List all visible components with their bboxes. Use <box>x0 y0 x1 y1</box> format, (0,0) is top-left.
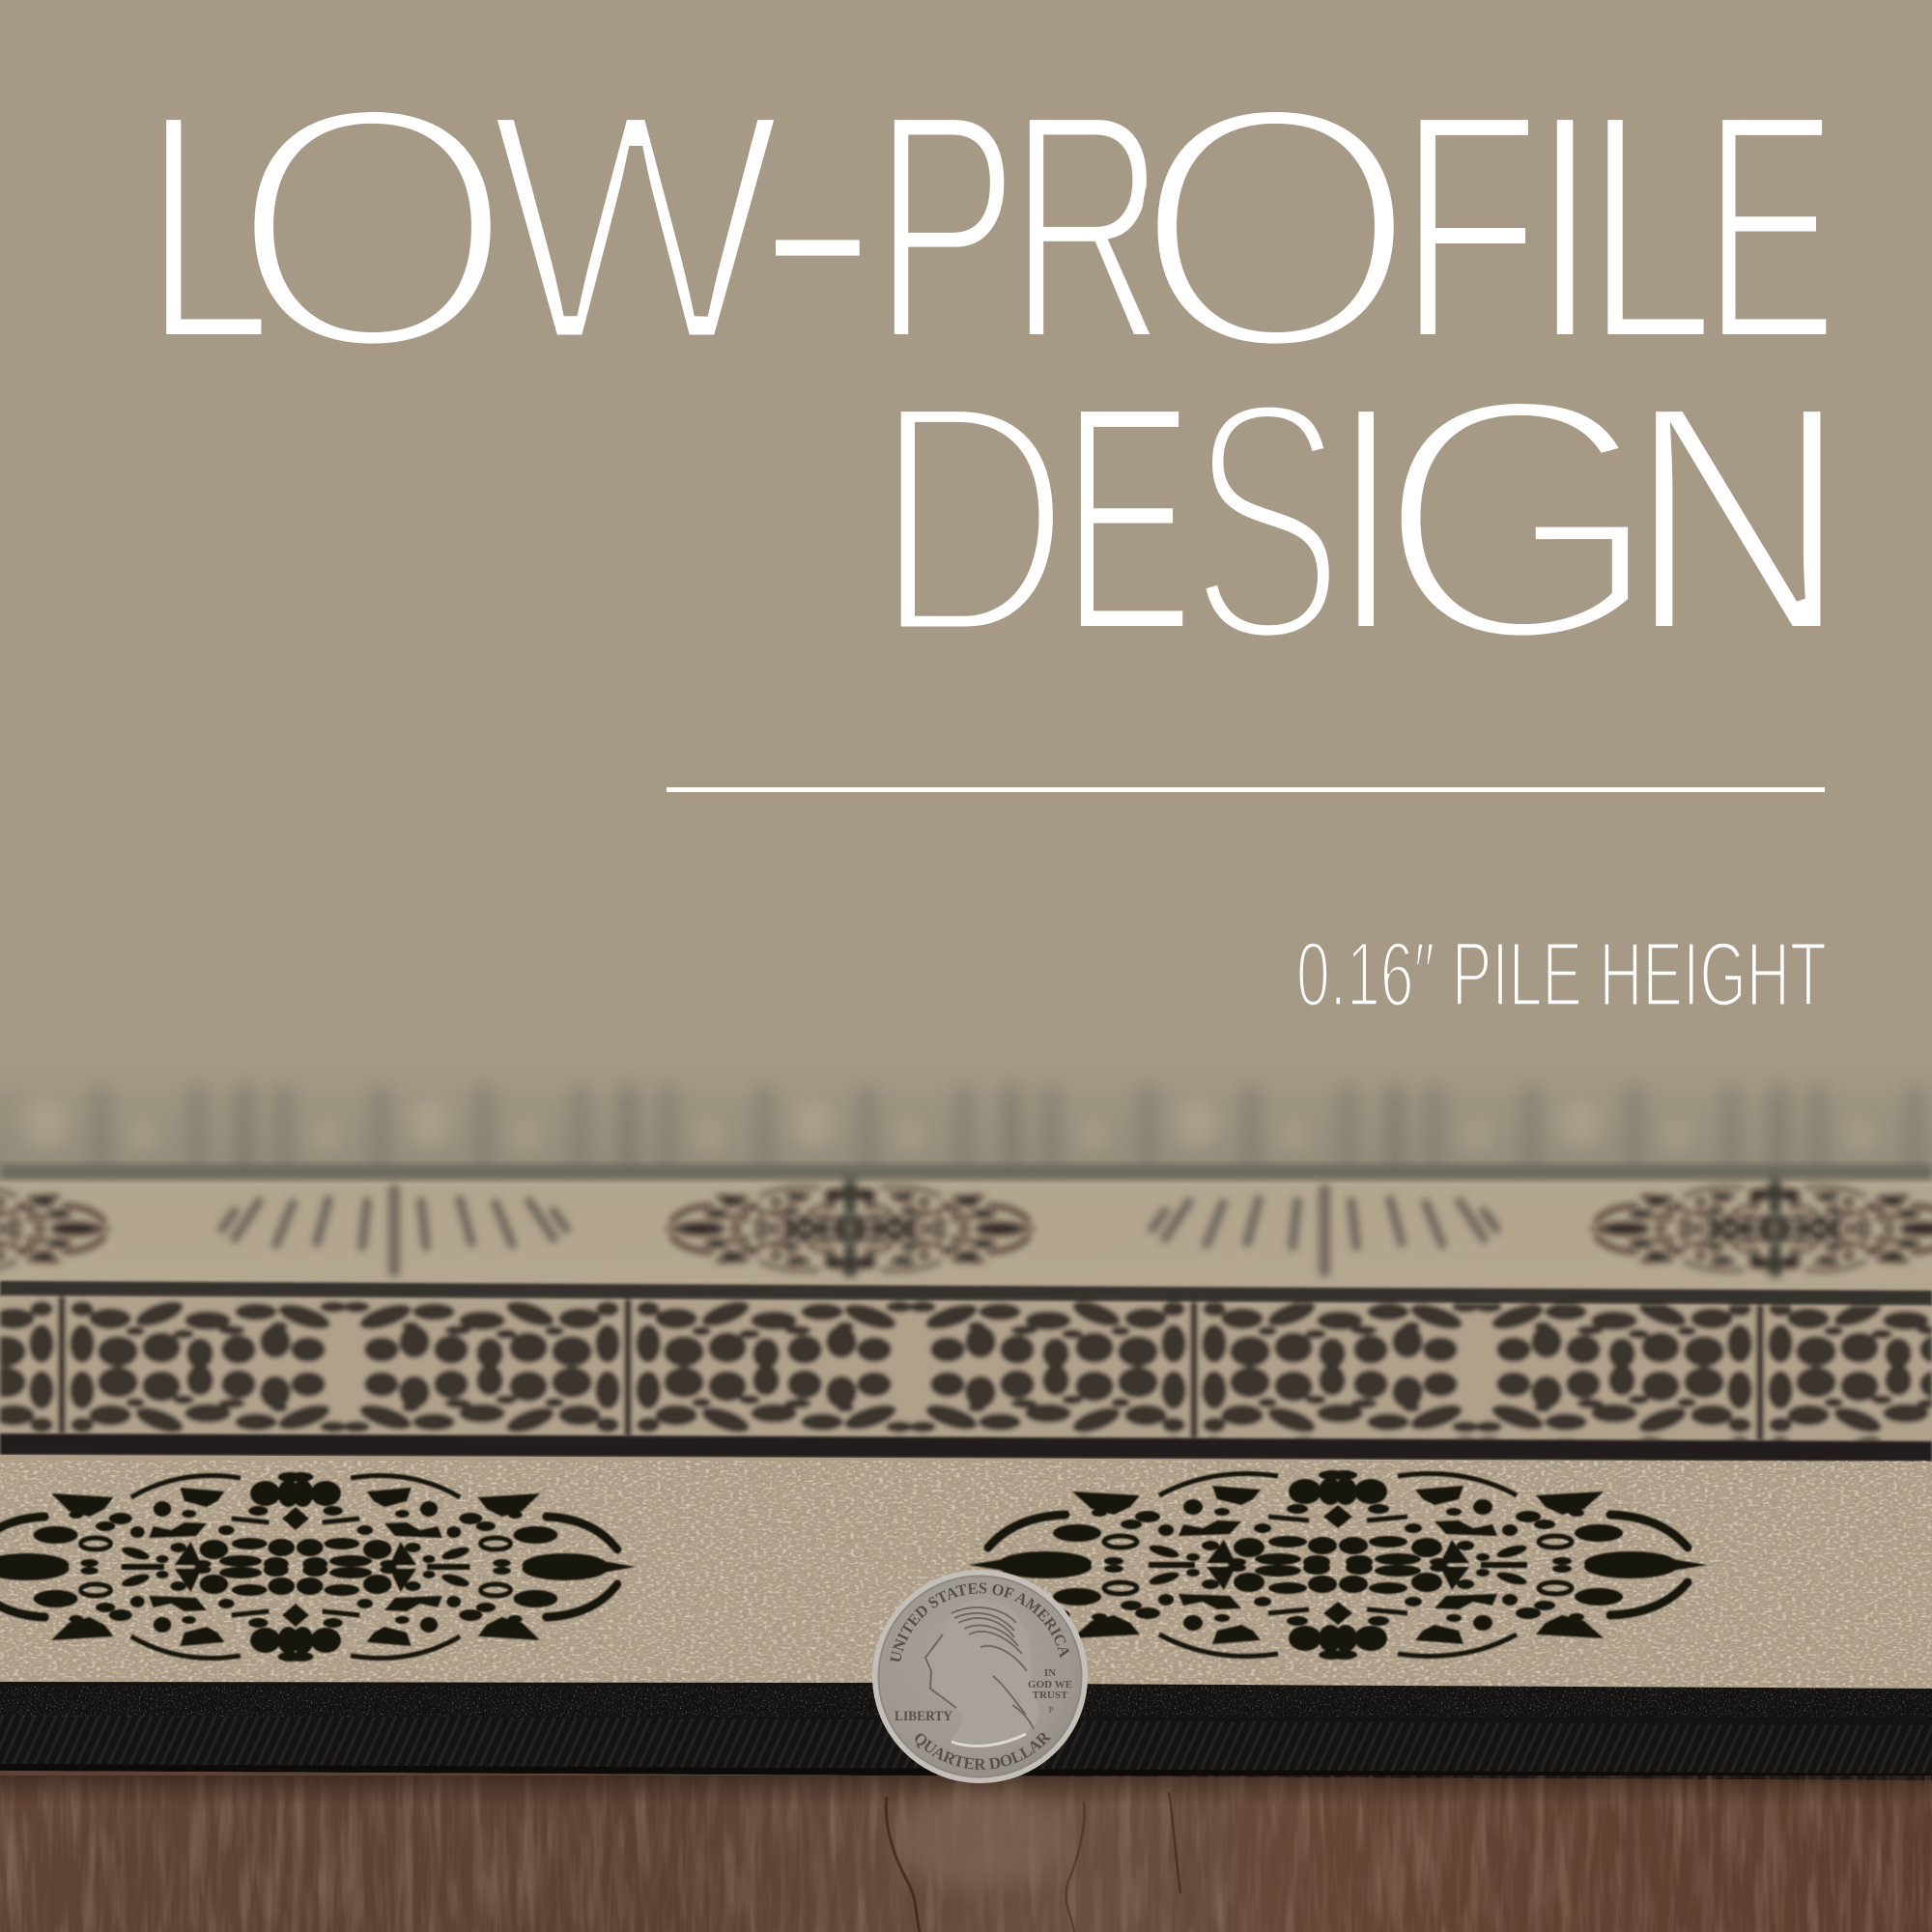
divider rule <box>667 787 1825 792</box>
rug band: woven field <box>0 1455 1932 1689</box>
medallion: left <box>0 1472 635 1662</box>
title: I <box>1530 45 1600 409</box>
title: D <box>872 332 1072 705</box>
coin legend: motto: IN <box>1044 1667 1056 1679</box>
title <box>144 33 1850 714</box>
wood floor <box>0 1771 1932 1932</box>
title: - <box>753 41 883 404</box>
title: L <box>1585 45 1715 409</box>
rug band: blurred medallions and fans <box>0 1177 1932 1278</box>
rug base <box>0 1058 1932 1792</box>
coin legend: liberty: LIBERTY <box>895 1709 952 1724</box>
pile height label: 0.16″ PILE HEIGHT <box>1296 923 1827 1026</box>
title: F <box>1397 45 1541 409</box>
quarter coin <box>872 1570 1088 1783</box>
rug stripe: second dark border <box>0 1281 1932 1306</box>
title: G <box>1375 325 1663 714</box>
rug stripe: near dark border <box>0 1434 1932 1462</box>
medallion: right <box>969 1470 1707 1660</box>
coin legend: motto: GOD WE <box>1028 1679 1072 1690</box>
rug binding: black edge <box>0 1682 1932 1780</box>
coin bust <box>924 1599 1039 1746</box>
coin legend: top: UNITED STATES OF AMERICA <box>890 1582 1069 1662</box>
coin legend: bottom: QUARTER DOLLAR <box>915 1733 1051 1770</box>
title: L <box>144 45 272 409</box>
title: O <box>1132 33 1420 422</box>
title: O <box>229 33 517 422</box>
title: I <box>1333 337 1400 700</box>
rug band: dense patterned border <box>0 1296 1932 1441</box>
title: W <box>487 41 784 413</box>
title: E <box>1062 337 1194 700</box>
title: R <box>1009 45 1166 409</box>
title: N <box>1625 337 1850 700</box>
title: S <box>1189 329 1345 713</box>
coin mint mark: P <box>1048 1705 1054 1715</box>
title: E <box>1703 45 1838 409</box>
coin legend: motto: TRUST <box>1033 1690 1068 1701</box>
title: P <box>873 45 1019 409</box>
rug band: far blurred pattern <box>0 1058 1932 1179</box>
